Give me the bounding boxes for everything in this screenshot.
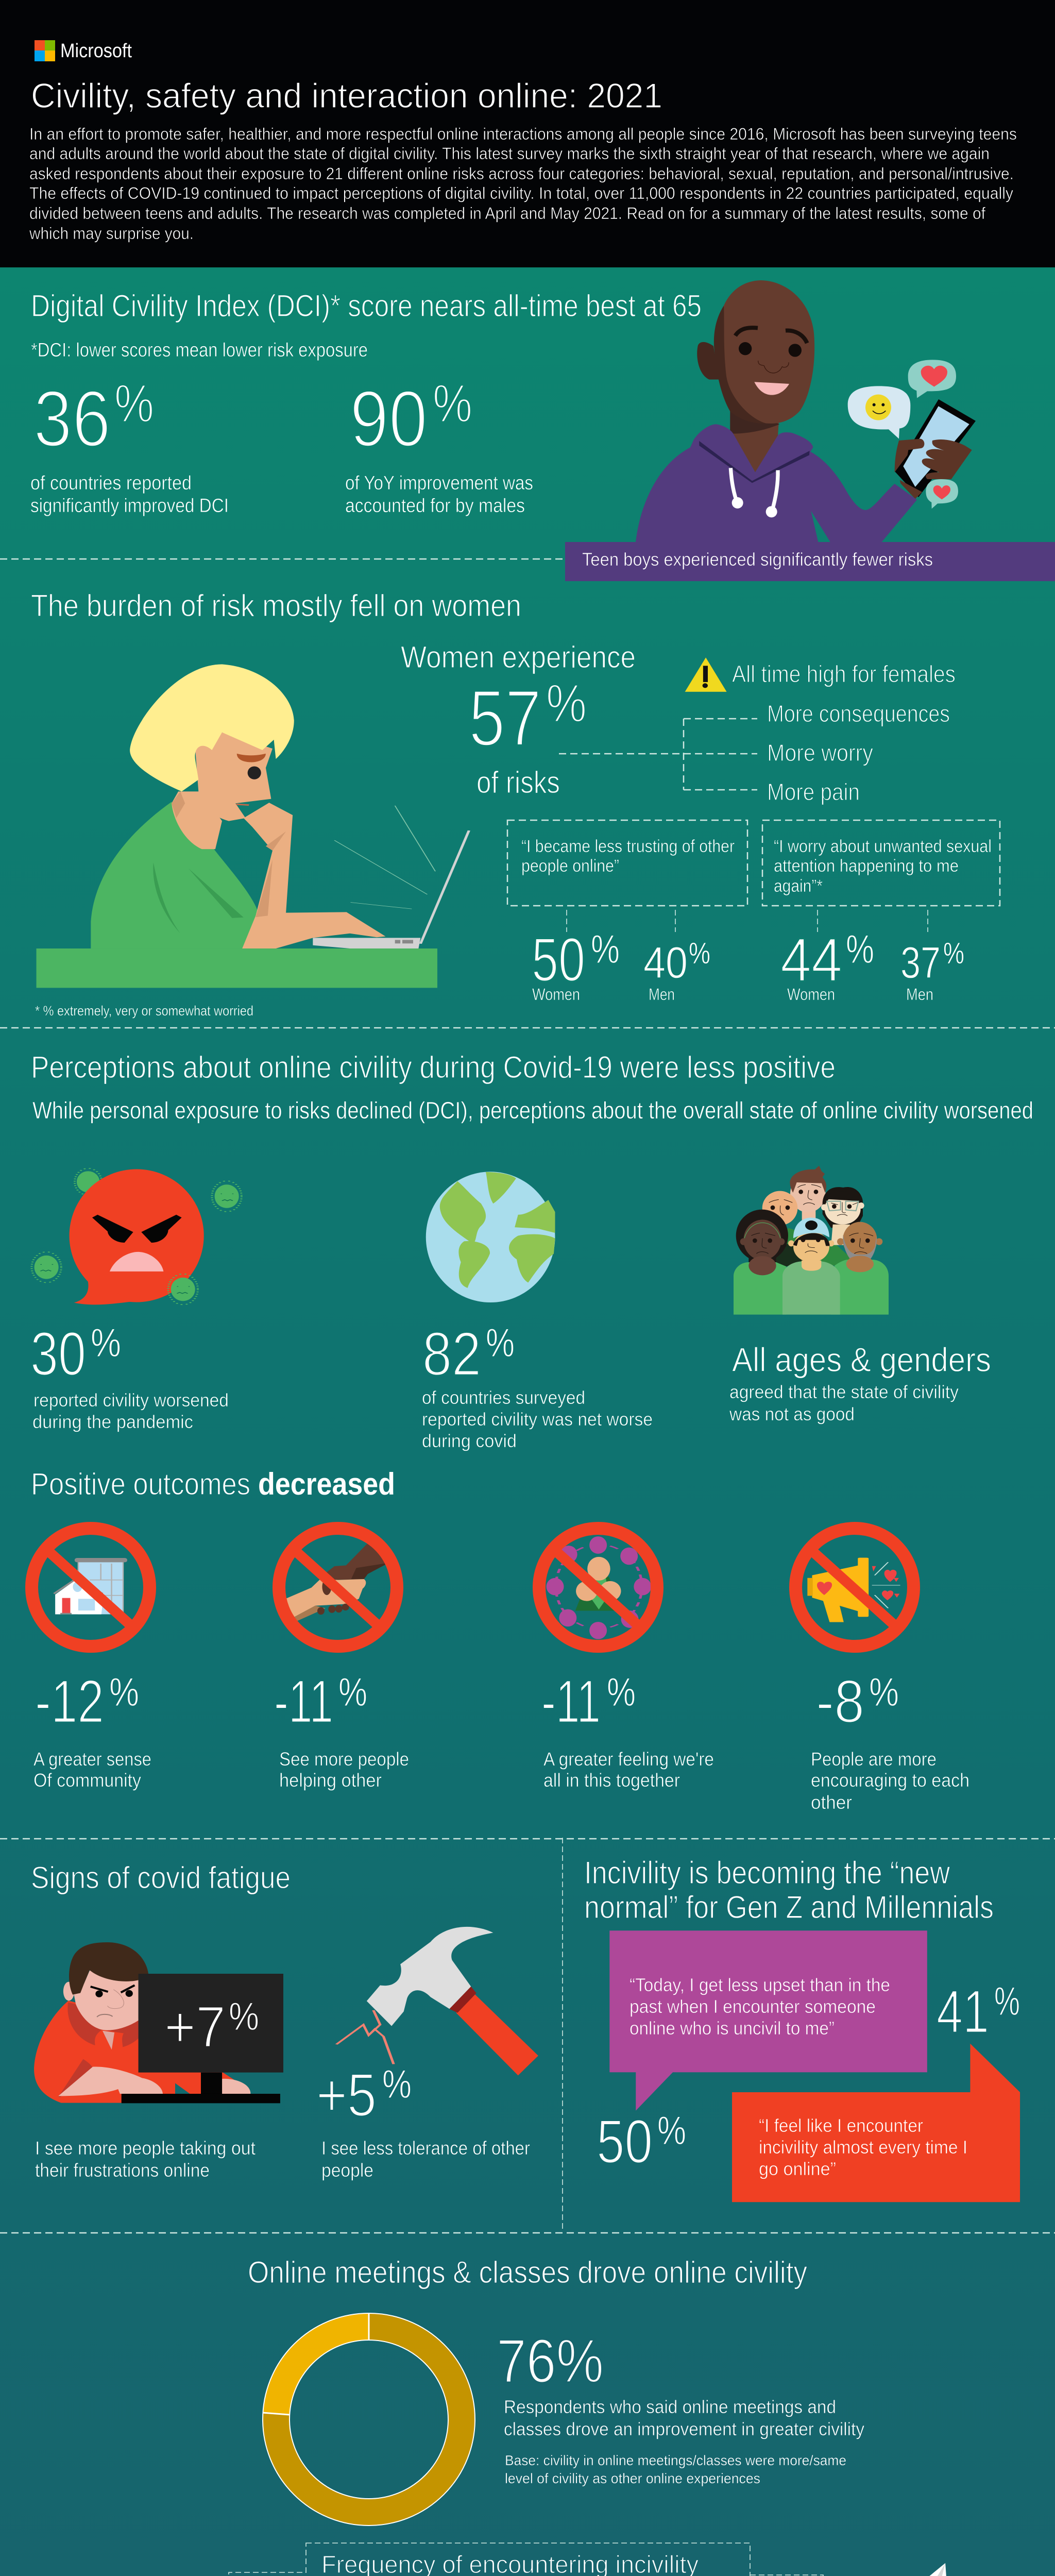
icon: angry speech bubble with viruses <box>31 1168 242 1304</box>
intro paragraph: The effects of COVID-19 continued to impact perceptions of digital civility. In total, over 11,000 respondents in 22 countries participated, equally <box>29 184 1013 202</box>
stat: attention women and men: Men <box>906 985 933 1004</box>
stat: 41 percent: 41 <box>937 1978 989 2046</box>
stat: minus 12 percent <box>33 1668 151 1791</box>
stat: 76 percent: classes drove an improvement in greater civility <box>504 2418 864 2439</box>
stat: 41 percent: % <box>994 1978 1020 2024</box>
banner: teen boys: Teen boys experienced significantly fewer risks <box>582 549 933 570</box>
panel: online meetings and classes <box>0 2255 1055 2576</box>
stat: all ages and genders: was not as good <box>729 1403 855 1425</box>
stat: attention women and men: 37 <box>900 938 941 988</box>
list: consequences: More consequences <box>767 700 950 727</box>
panel: incivility new normal <box>0 1855 1055 2233</box>
heading: online meetings: Online meetings & classes drove online civility <box>248 2255 807 2290</box>
stat: 50 percent: % <box>657 2108 686 2153</box>
stat: 76 percent: Base: civility in online meetings/classes were more/same <box>505 2452 846 2468</box>
intro paragraph: divided between teens and adults. The research was completed in April and May 2021. Read on for a summary of the latest results, some of <box>29 204 985 223</box>
stat: 50 percent: 50 <box>597 2107 653 2176</box>
school classes bar with pencil and plane <box>668 2563 950 2576</box>
list: consequences: More pain <box>767 778 860 805</box>
intro paragraph: and adults around the world about the state of digital civility. This latest survey marks the sixth straight year of that research, where we again <box>29 144 990 163</box>
quote: less trusting: people online” <box>521 856 619 876</box>
stat: attention women and men: % <box>943 937 964 970</box>
Microsoft logo: Microsoft <box>60 40 132 62</box>
text: less tolerance: I see less tolerance of other <box>321 2138 530 2159</box>
stat: minus 12 percent: A greater sense <box>33 1749 151 1770</box>
stat: 76 percent <box>497 2327 864 2486</box>
stat: 90 percent: % <box>433 374 472 434</box>
heading: positive outcomes: decreased <box>258 1467 395 1501</box>
stat: minus 11 percent helping: -11 <box>274 1668 333 1736</box>
text: frustrations online <box>35 2138 256 2181</box>
quote: unwanted attention: again”* <box>774 876 823 896</box>
stat: minus 8 percent: other <box>811 1792 852 1813</box>
stat: 82 percent: % <box>486 1320 515 1365</box>
icon: group of worried people <box>734 1166 889 1315</box>
heading: new normal: normal” for Gen Z and Millennials <box>584 1890 994 1925</box>
intro paragraph: In an effort to promote safer, healthier, and more respectful online interactions among all people since 2016, Microsoft has been surveying teens <box>29 125 1017 143</box>
stat: 30 percent: % <box>91 1320 121 1365</box>
stat: trust women and men: % <box>689 937 710 970</box>
label box: frequency of incivility <box>306 2543 750 2576</box>
stat: women experience 57 percent of risks: Women experience <box>401 640 636 674</box>
stat: minus 12 percent: -12 <box>35 1668 104 1736</box>
stat: women experience 57 percent of risks: 57 <box>469 673 541 762</box>
callout: purple speech bubble: past when I encounter someone <box>629 1996 876 2017</box>
stat: attention women and men: % <box>846 926 874 972</box>
stat: attention women and men: 44 <box>780 925 842 994</box>
stat: all ages and genders: agreed that the state of civility <box>729 1381 959 1402</box>
text: frustrations online: their frustrations online <box>35 2160 210 2181</box>
stat: 76 percent: level of civility as other online experiences <box>505 2470 760 2486</box>
quote: unwanted attention: attention happening to me <box>774 856 959 876</box>
panel: perceptions during Covid-19 <box>30 1050 1033 1451</box>
heading: positive outcomes <box>31 1467 395 1501</box>
panel: burden of risk on women <box>0 588 1055 1028</box>
illustration: worried woman at laptop <box>37 664 469 988</box>
icon: no helping hands <box>277 1528 397 1647</box>
icon: no togetherness <box>539 1528 657 1647</box>
stat: minus 11 percent together: % <box>607 1669 636 1715</box>
intro paragraph: which may surprise you. <box>29 224 194 243</box>
stat: trust women and men: 40 <box>643 938 688 988</box>
stat: minus 12 percent: % <box>109 1669 139 1715</box>
heading: new normal <box>584 1855 994 1925</box>
title: Civility, safety and interaction online: 2021 <box>31 76 662 115</box>
icon: warning triangle <box>685 657 727 692</box>
callout: red speech bubble <box>732 2044 1020 2202</box>
panel: signs of covid fatigue <box>31 1860 538 2181</box>
stat: minus 11 percent helping: % <box>338 1669 367 1715</box>
text: less tolerance <box>321 2138 530 2181</box>
stat: 30 percent <box>30 1319 229 1432</box>
stat: trust women and men <box>532 925 710 1004</box>
stat: plus 5 percent: % <box>382 2061 412 2107</box>
quote: less trusting <box>507 820 747 906</box>
stat: 82 percent <box>422 1319 653 1451</box>
text: frustrations online: I see more people taking out <box>35 2138 256 2159</box>
stat: 36 percent: 36 <box>33 374 111 463</box>
stat: minus 8 percent: % <box>869 1669 899 1715</box>
stat: minus 8 percent <box>811 1668 969 1813</box>
banner: teen boys <box>565 542 1055 581</box>
text: less tolerance: people <box>321 2160 373 2181</box>
stat: attention women and men: Women <box>787 985 835 1004</box>
icon: no community house <box>32 1528 149 1647</box>
stat: trust women and men: Men <box>649 985 675 1004</box>
stat: 30 percent: reported civility worsened <box>33 1389 229 1411</box>
stat: plus 7 percent: % <box>229 1995 259 2039</box>
stat: 76 percent: 76% <box>497 2327 604 2396</box>
stat: plus 7 percent: +7 <box>164 1994 226 2059</box>
callout: red speech bubble: incivility almost every time I <box>759 2137 967 2158</box>
illustration: hammer <box>336 1927 538 2075</box>
panel: header <box>29 40 1017 243</box>
stat: minus 11 percent together: -11 <box>541 1668 601 1736</box>
quote: unwanted attention: “I worry about unwanted sexual <box>774 837 992 856</box>
stat: 36 percent: significantly improved DCI <box>30 495 229 517</box>
stat: minus 11 percent helping <box>274 1668 409 1791</box>
stat: plus 5 percent: +5 <box>316 2061 377 2129</box>
stat: all ages and genders: All ages & genders <box>732 1341 991 1379</box>
icon: no encouragement megaphone <box>795 1528 914 1647</box>
stat: women experience 57 percent of risks: % <box>546 674 587 734</box>
stat: attention women and men <box>780 925 964 1004</box>
chart: donut 76 percent <box>263 2313 475 2526</box>
stat: minus 12 percent: Of community <box>33 1770 141 1791</box>
callout: purple speech bubble: online who is uncivil to me” <box>629 2018 835 2039</box>
intro paragraph: asked respondents about their exposure to 21 different online risks across four categories: behavioral, sexual, reputation, and personal/intrusive. <box>29 164 1014 183</box>
stat: 90 percent: 90 <box>350 374 428 463</box>
heading: covid fatigue: Signs of covid fatigue <box>31 1860 291 1895</box>
stat: 90 percent: accounted for by males <box>345 495 525 517</box>
quote: unwanted attention <box>762 820 1000 906</box>
heading: burden of risk: The burden of risk mostly fell on women <box>31 588 521 623</box>
stat: 90 percent: of YoY improvement was <box>345 472 533 494</box>
stat: minus 11 percent helping: helping other <box>279 1770 382 1791</box>
stat: minus 11 percent helping: See more people <box>279 1749 409 1770</box>
icon: globe <box>426 1172 555 1302</box>
callout: red speech bubble: go online” <box>759 2158 836 2179</box>
stat: 90 percent <box>345 374 533 517</box>
stat: women experience 57 percent of risks <box>401 640 636 800</box>
stat: minus 11 percent together: A greater feeling we're <box>543 1749 714 1770</box>
callout: purple speech bubble: “Today, I get less upset than in the <box>629 1974 890 1995</box>
callout: purple speech bubble <box>609 1930 927 2111</box>
quote: less trusting: “I became less trusting of other <box>521 837 735 856</box>
stat: 36 percent <box>30 374 229 517</box>
stat: 82 percent: 82 <box>422 1319 481 1388</box>
footnote: worried: * % extremely, very or somewhat worried <box>35 1003 253 1019</box>
stat: 36 percent: % <box>114 374 154 434</box>
illustration: teen boy with phone <box>636 280 976 542</box>
callout: red speech bubble: “I feel like I encounter <box>759 2115 923 2136</box>
heading: new normal: Incivility is becoming the “new <box>584 1855 950 1891</box>
stat: minus 8 percent: encouraging to each <box>811 1770 969 1791</box>
stat: 36 percent: of countries reported <box>30 472 192 494</box>
connector: consequences <box>559 719 757 790</box>
stat: 82 percent: during covid <box>422 1430 517 1451</box>
stat: 30 percent: during the pandemic <box>32 1411 193 1432</box>
stat: trust women and men: Women <box>532 985 580 1004</box>
intro paragraph <box>29 125 1017 243</box>
illustration: angry man at monitor <box>34 1942 283 2103</box>
panel: positive outcomes decreased <box>0 1467 1055 2231</box>
heading: positive outcomes: Positive outcomes <box>31 1467 250 1501</box>
stat: trust women and men: % <box>591 926 620 972</box>
heading: DCI: Digital Civility Index (DCI)* score nears all-time best at 65 <box>31 289 702 323</box>
DCI footnote: *DCI: lower scores mean lower risk exposure <box>31 340 368 361</box>
stat: all ages and genders <box>729 1341 991 1425</box>
stat: women experience 57 percent of risks: of risks <box>477 765 560 800</box>
stat: 82 percent: of countries surveyed <box>422 1387 585 1408</box>
stat: 76 percent: Respondents who said online meetings and <box>504 2396 836 2417</box>
stat: minus 8 percent: -8 <box>816 1668 864 1736</box>
stat: minus 11 percent together: all in this together <box>543 1770 680 1791</box>
stat: minus 8 percent: People are more <box>811 1749 937 1770</box>
stat: minus 11 percent together <box>541 1668 714 1791</box>
stat: 30 percent: 30 <box>30 1319 86 1388</box>
list: consequences: More worry <box>767 739 873 766</box>
panel: Digital Civility Index <box>0 280 1055 581</box>
heading: perceptions: Perceptions about online civility during Covid-19 were less positive <box>31 1050 836 1084</box>
Microsoft logo <box>35 40 132 62</box>
stat: trust women and men: 50 <box>532 925 585 994</box>
stat: 82 percent: reported civility was net worse <box>422 1409 653 1430</box>
list: consequences <box>767 700 950 805</box>
text: all time high: All time high for females <box>732 660 956 687</box>
